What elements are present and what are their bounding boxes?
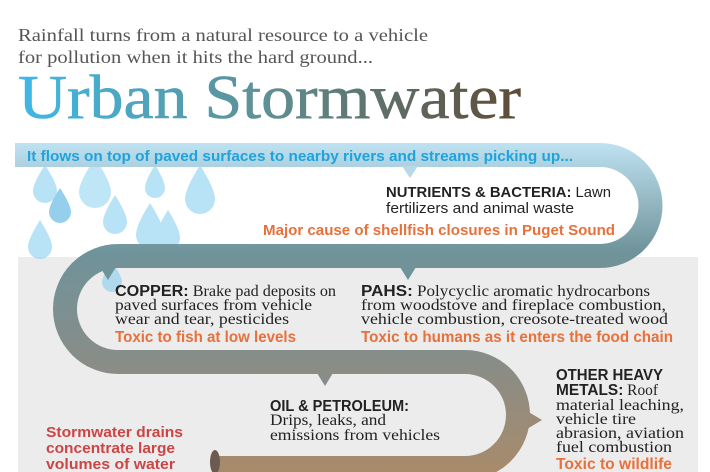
arrow pointers	[402, 166, 418, 178]
subtitle: for pollution when it hits the hard ground...	[18, 47, 373, 67]
title: Urban Stormwater	[18, 64, 521, 132]
text block: PAHs: Toxic to humans as it enters the food chain	[361, 329, 673, 346]
text block: PAHs	[361, 283, 673, 346]
panel: gray background	[18, 257, 698, 472]
text block: PAHs: from woodstove and fireplace combustion,	[361, 297, 666, 314]
text block: copper: Toxic to fish at low levels	[115, 329, 296, 346]
text block: nutrients: NUTRIENTS & BACTERIA: Lawn	[386, 184, 611, 201]
callout: stormwater drains	[46, 424, 183, 472]
text block: heavy metals: METALS: Roof	[556, 382, 659, 399]
text block: PAHs: PAHS: Polycyclic aromatic hydrocarbons	[361, 283, 650, 300]
intro text: It flows on top of paved surfaces to nearby rivers and streams picking up...	[27, 148, 573, 165]
text block: nutrients	[263, 184, 615, 239]
text block: nutrients: Major cause of shellfish closures in Puget Sound	[263, 222, 615, 239]
text block: PAHs: vehicle combustion, creosote-treated wood	[361, 311, 668, 328]
text block: copper: COPPER: Brake pad deposits on	[115, 283, 336, 300]
text block: copper: wear and tear, pesticides	[115, 311, 289, 328]
pipe: stormwater flow	[15, 155, 650, 472]
text block: oil: emissions from vehicles	[270, 427, 440, 444]
text block: heavy metals: vehicle tire	[556, 411, 636, 428]
text block: oil: OIL & PETROLEUM:	[270, 398, 409, 415]
text block: oil	[270, 398, 440, 444]
callout: stormwater drains: Stormwater drains	[46, 424, 183, 441]
text block: heavy metals	[556, 367, 684, 472]
text block: copper: paved surfaces from vehicle	[115, 297, 312, 314]
text block: heavy metals: OTHER HEAVY	[556, 367, 663, 384]
text block: heavy metals: abrasion, aviation	[556, 425, 684, 442]
icon: drain pipe end	[210, 450, 220, 472]
subtitle	[18, 25, 428, 67]
text block: nutrients: fertilizers and animal waste	[386, 200, 574, 217]
text block: copper	[115, 283, 336, 346]
subtitle: Rainfall turns from a natural resource to a vehicle	[18, 25, 428, 45]
icon: raindrops	[28, 158, 215, 292]
callout: stormwater drains: concentrate large	[46, 440, 175, 457]
text block: oil: Drips, leaks, and	[270, 412, 386, 429]
text block: heavy metals: fuel combustion	[556, 439, 672, 456]
text block: heavy metals: material leaching,	[556, 397, 684, 414]
